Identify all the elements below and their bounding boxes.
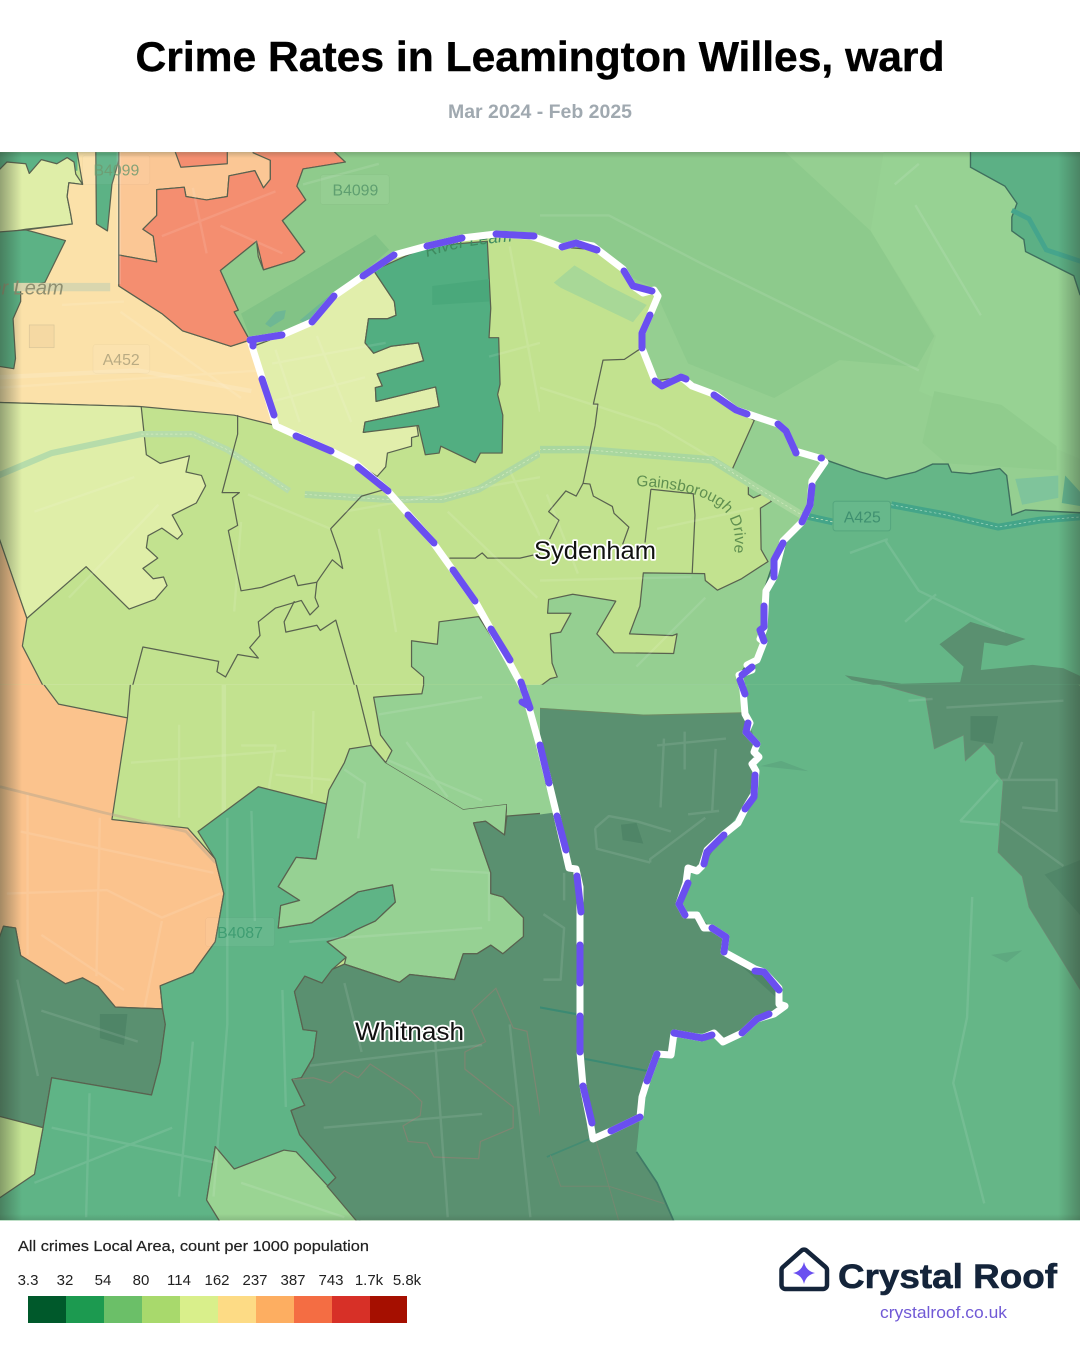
- icon: house with star: [782, 1250, 827, 1289]
- legend scale labels: [18, 1272, 422, 1289]
- ward boundary: white base: [250, 234, 825, 1139]
- road shield: A452: [93, 345, 150, 373]
- legend: [18, 1238, 422, 1323]
- ward-side yellow-green area: [537, 236, 771, 689]
- legend scale labels: 80: [133, 1272, 149, 1289]
- ward southern dark area: [537, 708, 785, 1224]
- website link: crystalroof.co.uk: [880, 1304, 1008, 1322]
- road shield: B4099 east: B4099: [333, 182, 378, 199]
- map quadrant: south-west: [0, 677, 551, 1231]
- road shield: B4099: B4099: [94, 162, 139, 179]
- map quadrant: south-east: [537, 677, 1080, 1224]
- ward boundary: violet dashes: [250, 234, 822, 1131]
- place label: Sydenham: Sydenham: [534, 537, 656, 565]
- road shield: B4087: [206, 918, 274, 947]
- place label: Whitnash: Whitnash: [355, 1018, 464, 1046]
- legend scale labels: 387: [280, 1272, 306, 1289]
- road shield: A425: A425: [844, 509, 881, 526]
- road shield: B4099: [83, 155, 150, 184]
- legend scale labels: 1.7k: [355, 1272, 384, 1289]
- river and road band: [538, 450, 1080, 527]
- logo wordmark: Crystal Roof: [838, 1258, 1058, 1296]
- legend scale labels: 743: [318, 1272, 344, 1289]
- canal: [0, 434, 540, 500]
- legend scale labels: 32: [57, 1272, 73, 1289]
- map quadrant: north-west: [0, 148, 551, 692]
- road shield: B4087: B4087: [217, 925, 263, 942]
- legend scale labels: 162: [204, 1272, 230, 1289]
- east dark settlement: [880, 684, 1080, 990]
- title: Crime Rates in Leamington Willes, ward: [136, 33, 944, 80]
- road shield: A425: [833, 501, 891, 531]
- legend scale labels: 237: [242, 1272, 268, 1289]
- subtitle: date range: Mar 2024 - Feb 2025: [448, 102, 632, 123]
- road label: River Leam: River Leam: [426, 238, 511, 257]
- legend title: All crimes Local Area, count per 1000 population: [18, 1238, 369, 1255]
- map quadrant: north-east: [537, 148, 1080, 701]
- road shield: A452: A452: [103, 352, 140, 369]
- legend colour scale: [28, 1296, 407, 1323]
- legend scale labels: 5.8k: [393, 1272, 422, 1289]
- edge vignette: [0, 152, 1080, 1220]
- road label: Gainsborough Drive: Gainsborough Drive: [637, 476, 746, 553]
- legend scale labels: 114: [167, 1272, 191, 1289]
- logo: Crystal Roof: [782, 1250, 1058, 1322]
- road shield: B4099 east: [320, 175, 389, 204]
- east green area: [739, 460, 1080, 701]
- legend scale labels: 54: [95, 1272, 111, 1289]
- legend scale labels: 3.3: [18, 1272, 38, 1289]
